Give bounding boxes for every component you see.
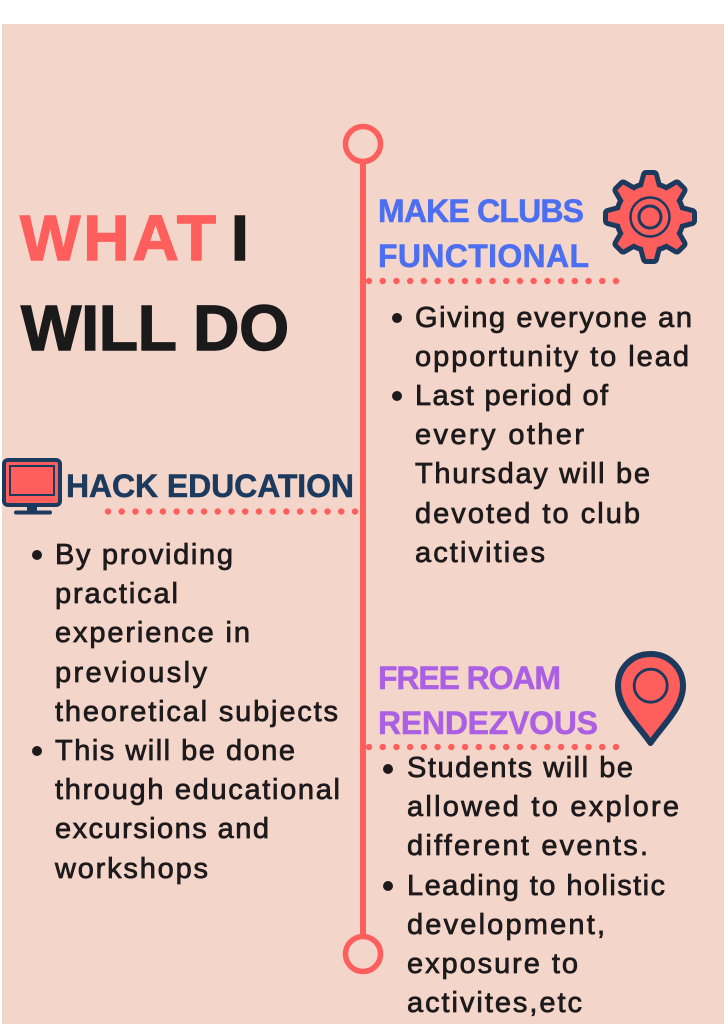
text block: make clubs bullets: opportunity to lead: [415, 341, 689, 373]
text block: make clubs bullets: every other: [415, 419, 584, 451]
heading: free roam rendezvous: FREE ROAM: [378, 660, 561, 696]
heading: free roam rendezvous: [378, 660, 598, 741]
text block: free roam bullets: Leading to holistic: [407, 870, 665, 902]
title: WHAT: [20, 202, 216, 274]
text block: hack education bullets: through educational: [55, 774, 340, 806]
text block: hack education bullets: This will be done: [55, 735, 295, 767]
dotted divider: hack education: [108, 508, 366, 515]
text block: free roam bullets: development,: [407, 909, 605, 941]
text block: free roam bullets: [383, 752, 679, 1019]
text block: make clubs bullets: activities: [415, 537, 545, 569]
title: [20, 202, 289, 364]
heading: free roam rendezvous: RENDEZVOUS: [378, 705, 598, 741]
heading: hack education: HACK EDUCATION: [66, 468, 354, 504]
icon: gear: [608, 175, 692, 259]
text block: make clubs bullets: devoted to club: [415, 498, 640, 530]
timeline: [346, 126, 380, 972]
icon: monitor: [4, 460, 60, 514]
title: I: [231, 202, 249, 274]
text block: free roam bullets: allowed to explore: [407, 791, 679, 823]
text block: hack education bullets: [32, 539, 340, 885]
heading: make clubs functional: MAKE CLUBS: [378, 193, 584, 229]
heading: make clubs functional: FUNCTIONAL: [378, 238, 589, 274]
title: WILL DO: [21, 292, 289, 364]
text block: free roam bullets: Students will be: [407, 752, 633, 784]
icon: map pin: [618, 654, 683, 743]
text block: free roam bullets: different events.: [407, 830, 648, 862]
dotted divider: free roam: [369, 744, 620, 750]
text block: make clubs bullets: Giving everyone an: [415, 302, 692, 334]
text block: hack education bullets: experience in: [55, 617, 250, 649]
text block: make clubs bullets: [392, 302, 692, 569]
text block: hack education bullets: previously: [55, 657, 208, 689]
text block: hack education bullets: theoretical subjects: [55, 696, 338, 728]
text block: hack education bullets: excursions and: [55, 813, 269, 845]
text block: make clubs bullets: Last period of: [415, 380, 609, 412]
heading: make clubs functional: [378, 193, 589, 274]
text block: free roam bullets: activites,etc: [407, 987, 582, 1019]
dotted divider: make clubs: [369, 278, 620, 284]
text block: free roam bullets: exposure to: [407, 948, 578, 980]
text block: hack education bullets: practical: [55, 578, 178, 610]
text block: hack education bullets: workshops: [54, 853, 208, 885]
text block: hack education bullets: By providing: [55, 539, 233, 571]
text block: make clubs bullets: Thursday will be: [415, 458, 650, 490]
